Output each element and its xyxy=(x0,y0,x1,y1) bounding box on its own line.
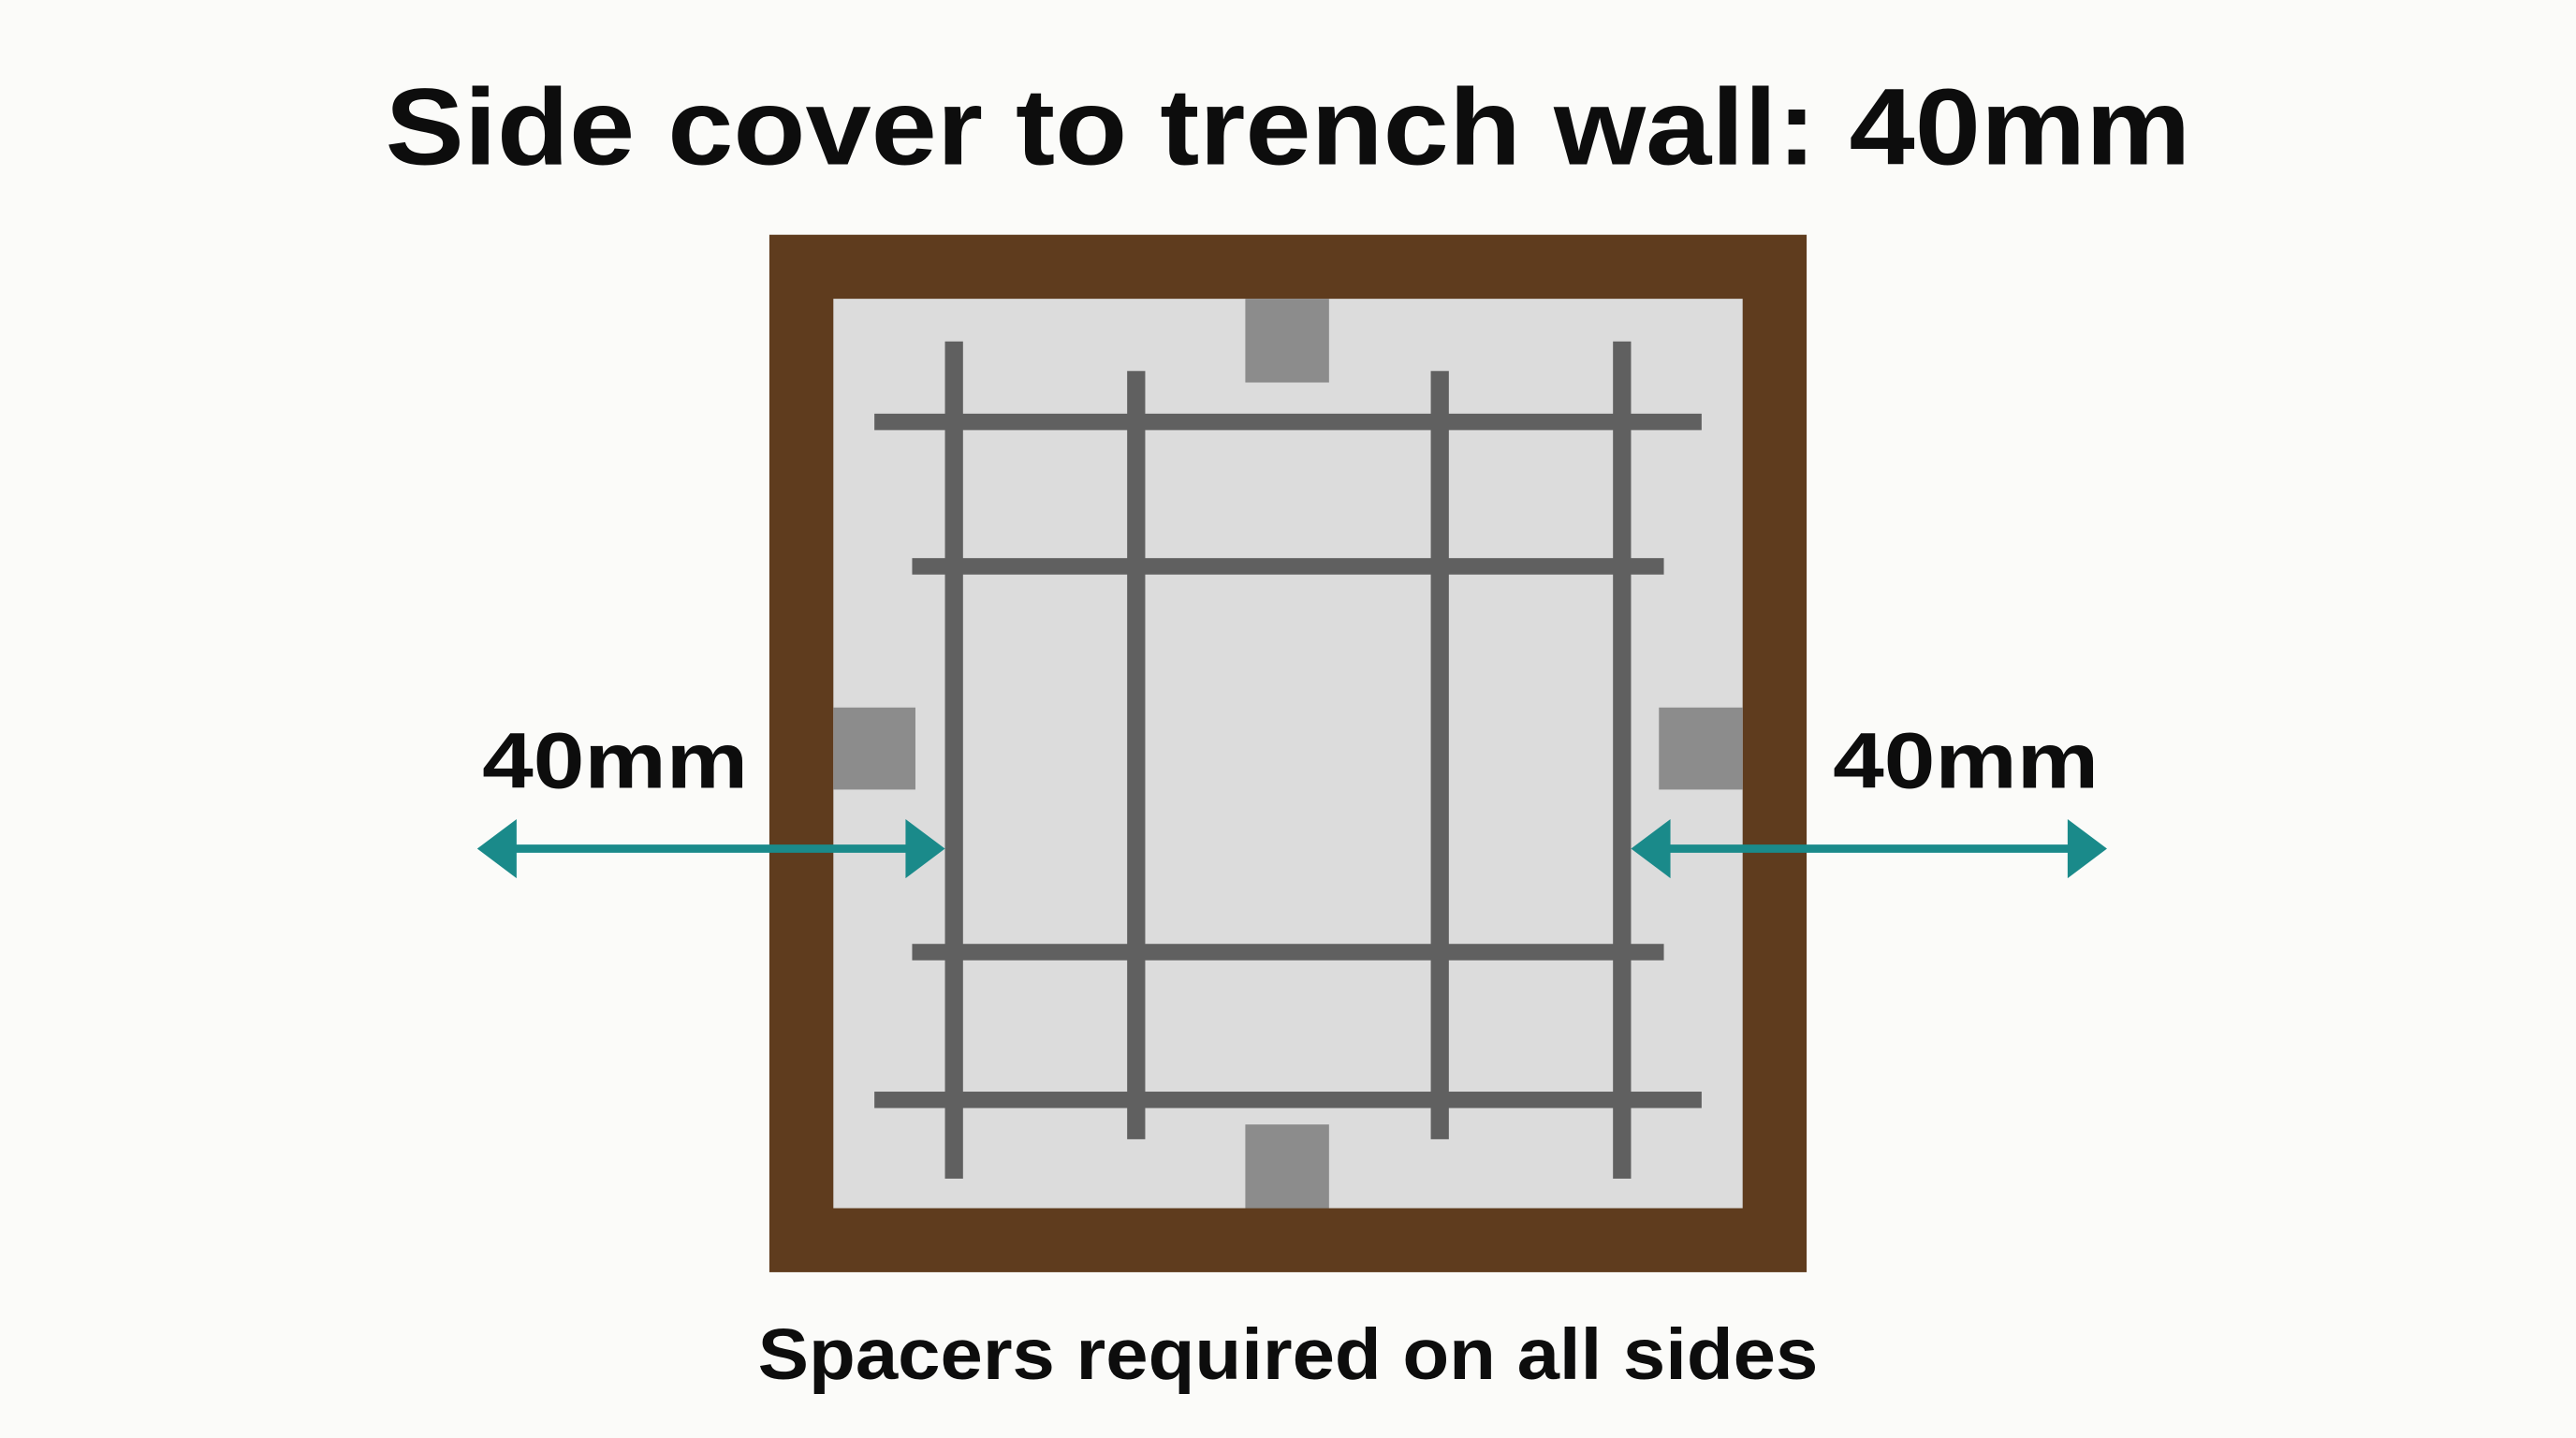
trench cross-section diagram xyxy=(769,235,1807,1272)
label: right 40mm: 40mm xyxy=(1833,717,2099,805)
arrow: left dimension xyxy=(477,819,945,878)
concrete xyxy=(833,299,1743,1209)
caption: Spacers required on all sides xyxy=(758,1314,1818,1395)
rebar cage xyxy=(874,342,1702,1179)
arrow: right dimension xyxy=(1631,819,2107,878)
label: left 40mm: 40mm xyxy=(482,717,748,805)
trench wall (soil) xyxy=(769,235,1807,1272)
title: Side cover to trench wall: 40mm xyxy=(386,66,2190,187)
spacers xyxy=(833,299,1743,1209)
